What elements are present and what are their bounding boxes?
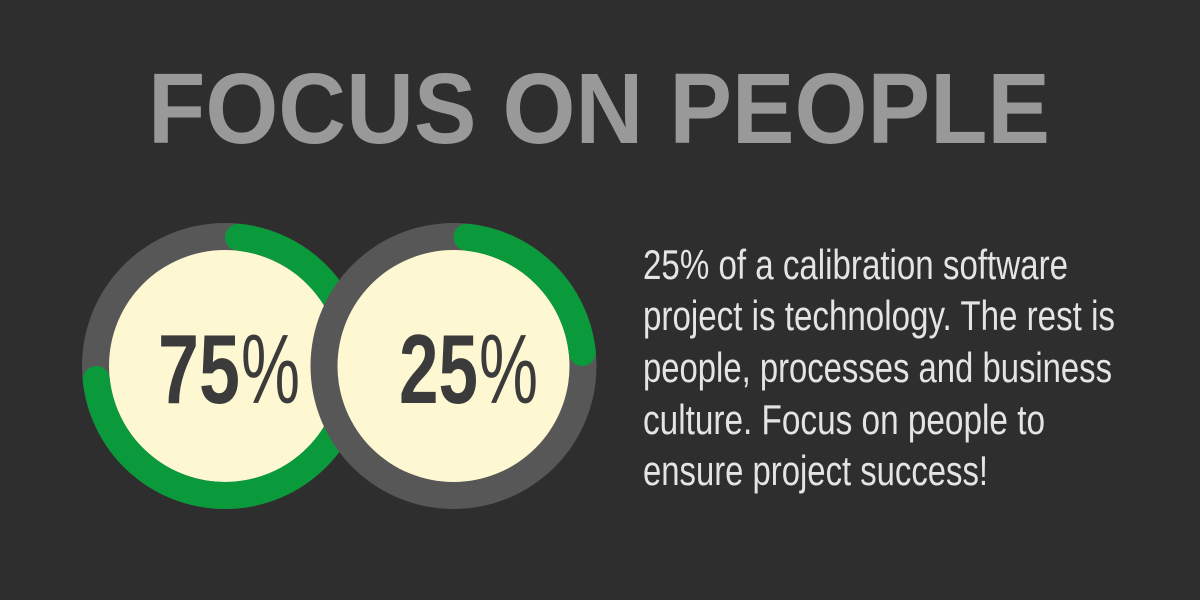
chart: 75% ring: 75 [158,314,240,424]
text block: description: ensure project success! [643,447,988,494]
text block: description [643,241,1115,494]
text block: description: culture. Focus on people to [643,396,1045,443]
chart: 75% ring [82,223,368,509]
title: FOCUS ON PEOPLE [148,53,1050,165]
chart: 25% ring: % [479,314,538,424]
chart: 75% ring: % [241,314,300,424]
chart: 25% ring: 25 [399,314,478,424]
chart: 25% ring [310,223,596,509]
text block: description: 25% of a calibration software [643,241,1068,288]
